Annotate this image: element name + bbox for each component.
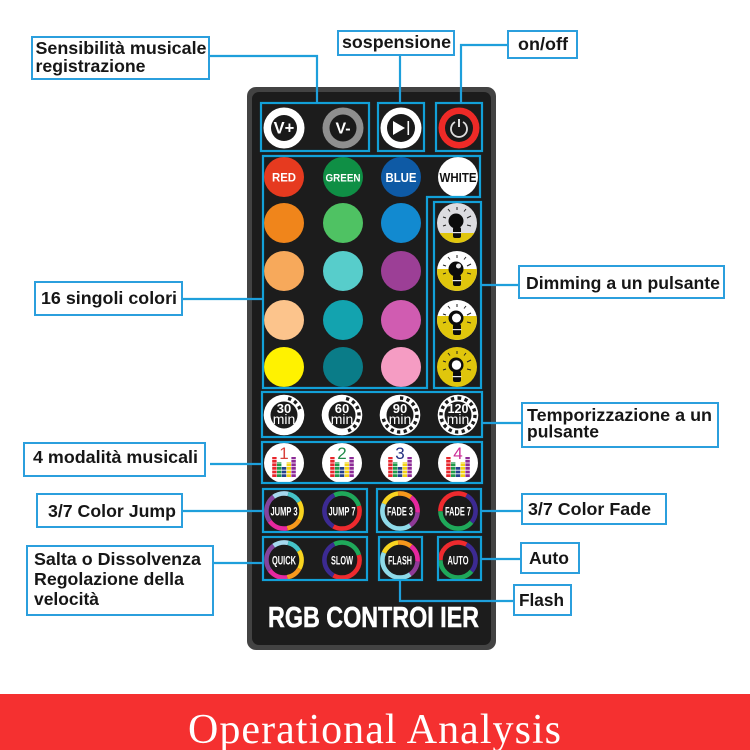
button: fade 3: FADE 3: [387, 504, 413, 518]
label: 16 singoli colori: 16 singoli colori: [41, 288, 177, 308]
button: music 1: 1: [279, 444, 289, 463]
button: fade 3: [380, 491, 420, 531]
button: slow: [322, 540, 362, 580]
button: 90 min: min: [389, 411, 411, 427]
button: auto: [438, 540, 478, 580]
button: power: [438, 108, 480, 148]
top row buttons: [264, 108, 480, 148]
button: flash: FLASH: [388, 554, 412, 568]
music mode buttons: [264, 443, 478, 483]
label: Sensibilità musicale registrazione: [32, 37, 209, 79]
button: V-: V-: [335, 120, 351, 138]
button: 30 min: min: [273, 411, 295, 427]
label: Salta o Dissolvenza Regolazione della velocità: Salta o Dissolvenza: [34, 549, 201, 569]
dimming buttons: [437, 203, 477, 387]
button: music 4: [438, 443, 478, 483]
label: 3/7 Color Fade: [522, 494, 666, 524]
button: fade 7: FADE 7: [445, 504, 471, 518]
button: quick: QUICK: [272, 554, 296, 568]
label: sospensione: sospensione: [342, 32, 451, 52]
label: Dimming a un pulsante: [519, 266, 724, 298]
button: play pause: [380, 108, 422, 148]
button: music 2: 2: [337, 444, 347, 463]
button: music 2: [322, 443, 362, 483]
button: quick: [264, 540, 304, 580]
button: 30 min: [264, 395, 304, 435]
button: 120 min: min: [447, 411, 469, 427]
colour buttons grid: [264, 157, 478, 387]
label: Sensibilità musicale registrazione: registrazione: [36, 56, 146, 76]
button: red: RED: [272, 170, 296, 184]
button: 60 min: [322, 395, 362, 435]
label: 16 singoli colori: [35, 282, 182, 315]
colour swatches: [264, 203, 421, 387]
button: jump 7: [322, 491, 362, 531]
button: blue: BLUE: [386, 171, 416, 185]
label: Salta o Dissolvenza Regolazione della velocità: velocità: [34, 589, 99, 609]
button: red: [264, 157, 304, 197]
label: Temporizzazione a un pulsante: pulsante: [527, 422, 599, 442]
label: 3/7 Color Fade: 3/7 Color Fade: [528, 499, 651, 519]
button: fade 7: [438, 491, 478, 531]
button: jump 3: JUMP 3: [270, 504, 298, 518]
button group highlight outlines: [261, 103, 482, 580]
label: 4 modalità musicali: [24, 443, 205, 476]
button: V-: [322, 108, 364, 148]
button: 120 min: 120: [448, 402, 468, 416]
button: music 3: [380, 443, 420, 483]
label: Auto: Auto: [529, 548, 569, 568]
label: on/off: on/off: [518, 34, 568, 54]
button: white: WHITE: [440, 170, 477, 185]
label: Flash: Flash: [519, 590, 564, 610]
label: Salta o Dissolvenza Regolazione della velocità: [27, 546, 213, 615]
label: on/off: [508, 31, 577, 58]
label: Temporizzazione a un pulsante: Temporizzazione a un: [527, 405, 712, 425]
button: flash: [380, 540, 420, 580]
button: green: GREEN: [326, 172, 361, 184]
icon: dim level 1: [437, 203, 477, 243]
label: Flash: [514, 585, 571, 615]
icon: dim level 4: [437, 347, 477, 387]
button: jump 7: JUMP 7: [328, 504, 356, 518]
label: Auto: [521, 543, 579, 573]
button: 60 min: 60: [335, 401, 349, 416]
icon: dim level 3: [437, 300, 477, 340]
timer buttons: [264, 395, 478, 435]
button: jump 3: [264, 491, 304, 531]
button: music 3: 3: [395, 444, 405, 463]
label: Temporizzazione a un pulsante: [522, 403, 718, 447]
icon: dim level 2: [437, 251, 477, 291]
button: 90 min: 90: [393, 401, 407, 416]
button: 90 min: [380, 395, 420, 435]
label: Dimming a un pulsante: Dimming a un pulsante: [526, 273, 720, 293]
button: music 4: 4: [453, 444, 463, 463]
button: V+: [264, 108, 304, 148]
connector lines: [182, 45, 522, 601]
footer banner: [0, 694, 750, 750]
button: blue: [381, 157, 421, 197]
remote brand text: RGB CONTROI IER: [268, 602, 479, 634]
button: 120 min: [438, 395, 478, 435]
label: 4 modalità musicali: 4 modalità musicali: [33, 447, 198, 467]
remote control body: [247, 87, 496, 650]
button: music 1: [264, 443, 304, 483]
button: green: [323, 157, 363, 197]
label: Sensibilità musicale registrazione: Sensibilità musicale: [36, 38, 207, 58]
button: white: [438, 157, 478, 197]
label: Salta o Dissolvenza Regolazione della velocità: Regolazione della: [34, 569, 184, 589]
button: 30 min: 30: [277, 401, 291, 416]
button: V+: V+: [274, 120, 294, 138]
button: 60 min: min: [331, 411, 353, 427]
button: slow: SLOW: [331, 554, 353, 568]
effect buttons: [264, 491, 478, 580]
label: 3/7 Color Jump: [37, 494, 182, 527]
label: 3/7 Color Jump: 3/7 Color Jump: [48, 501, 176, 521]
button: auto: AUTO: [448, 554, 468, 568]
